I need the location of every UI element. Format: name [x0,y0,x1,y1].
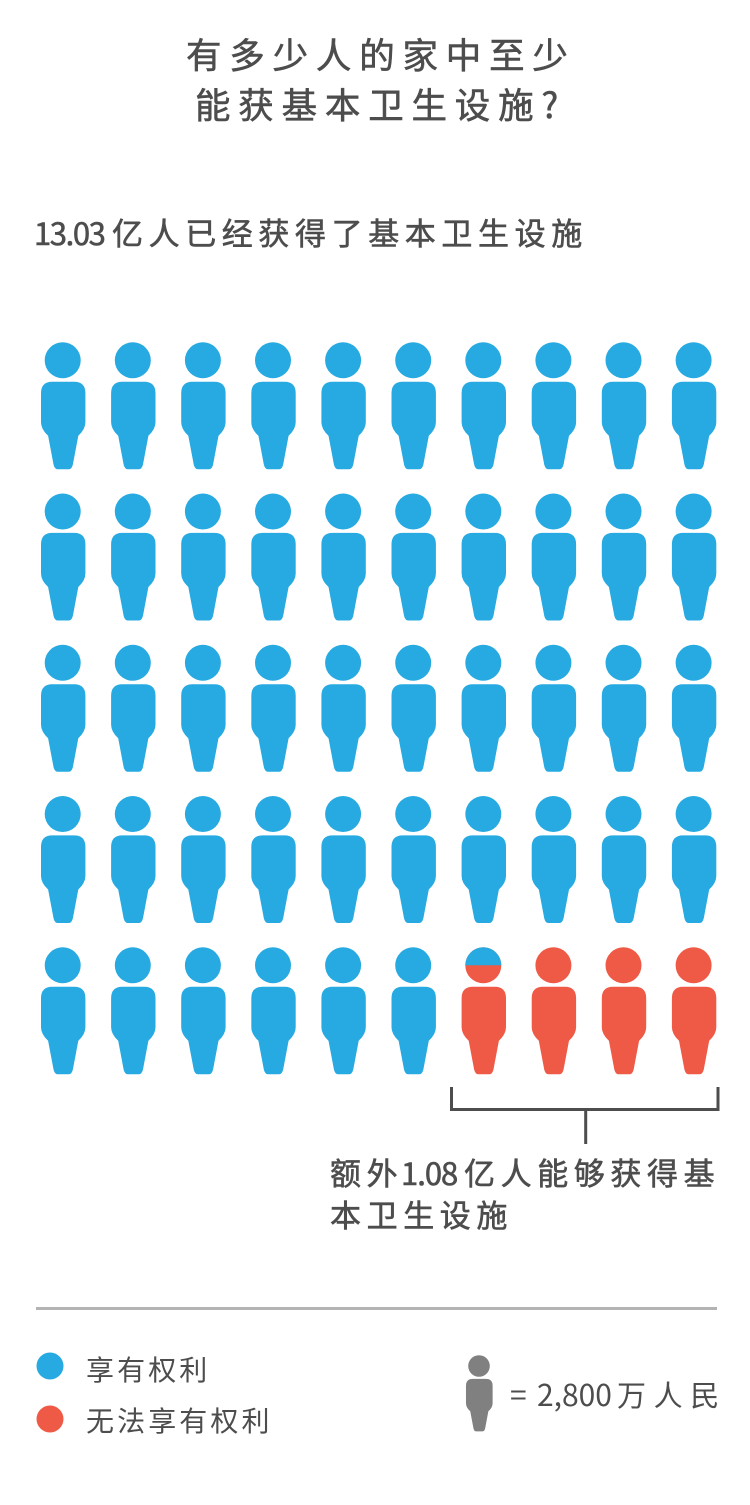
row 5 of people: red part [462,947,716,1074]
callout text: 1.08 [401,1149,457,1194]
title: 有多少人的家中至少 [186,28,576,79]
legend: no right: 无法享有权利 [86,1400,273,1440]
callout text: 亿人能够获得基 [464,1149,720,1194]
row 2 of people [41,494,716,620]
legend: has the right: 享有权利 [86,1349,210,1389]
scale key: one figure equals 28 million people: 万人民 [617,1373,727,1415]
subtitle: people with basic sanitation: 13.03 [34,209,105,254]
scale key: one figure equals 28 million people: = [510,1371,527,1415]
bracket [452,1087,718,1144]
row 1 of people [41,342,716,469]
callout text: 额外 [330,1149,403,1194]
partial person: blue head cap [465,947,501,965]
scale key: one figure equals 28 million people [466,1355,727,1431]
subtitle: people with basic sanitation: 亿人已经获得了基本卫生设施 [112,209,588,254]
divider [36,1307,717,1310]
pictogram grid: 50 people [41,342,716,1074]
title [186,28,576,129]
row 4 of people [41,796,716,923]
row 3 of people [41,645,716,772]
scale key: one figure equals 28 million people: 2,800 [537,1371,612,1415]
callout text [330,1149,720,1236]
title: 能获基本卫生设施? [195,78,566,129]
row 5 of people: blue part [41,947,436,1074]
callout text: 本卫生设施 [330,1191,513,1236]
